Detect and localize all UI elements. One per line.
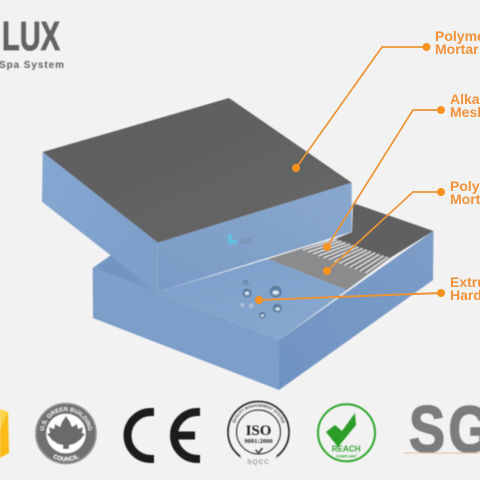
leader lines [259,47,441,300]
lower board top face [93,255,347,340]
badge: ISO 9001: ISO [246,423,271,439]
upper board top face [43,98,352,243]
brand logo [0,13,64,71]
badge: CE mark [128,412,200,459]
dark polymer mortar layer [335,203,434,258]
certification row [0,392,480,466]
upper board [42,98,352,292]
badge: ISO 9001: 9001:2000 [244,438,273,445]
badge: ISO 9001: SQCC [247,459,270,466]
watermark logo [228,234,252,245]
leader: mesh [327,110,441,247]
leader: top mortar [296,47,427,168]
badge: US Green Building Council [34,402,98,465]
mesh lines [303,240,388,273]
water droplets [240,280,282,318]
badge: REACH compliant: COMPLIANT [336,454,358,458]
leader dots [255,43,445,304]
watermark logo: LUX [240,239,252,245]
label: polymer mortar top: Mortar [435,41,479,57]
leader: hardboard [259,293,441,300]
mortar layer light [268,249,390,290]
lower board left face [93,268,279,390]
leader: lower mortar [327,192,441,271]
logo wordmark: LUX [2,13,60,59]
shadow under upper board [102,260,154,291]
badge: REACH compliant [318,404,375,461]
badge: ISO 9001 [226,400,291,466]
lower board right face [279,231,434,390]
badge: REACH compliant: REACH [332,444,361,454]
lower board [93,203,433,390]
badge: ISO 9001: QUALITY MANAGEMENT SYSTEM [232,403,286,424]
mesh strip [300,239,390,274]
labels [435,28,480,303]
badge: US Green Building Council: U.S. GREEN BUILDING [39,406,93,432]
badge: US Green Building Council: COUNCIL [52,454,80,462]
upper board right face [158,183,352,292]
icon: yellow box [0,409,9,458]
logo tagline: Spa System [0,60,64,71]
diagram: layered board [42,98,434,390]
upper board left face [42,152,158,292]
